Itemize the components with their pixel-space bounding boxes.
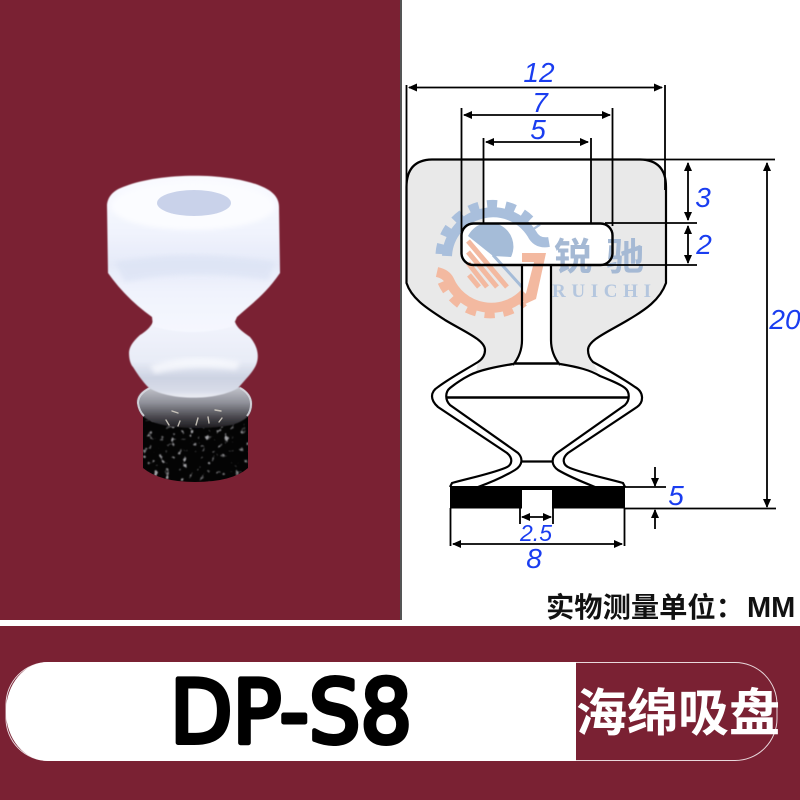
dimension: 20 height (766, 163, 768, 507)
cavity left contour (446, 364, 521, 487)
drawing fills (406, 160, 666, 372)
clear ring (137, 387, 252, 428)
dimension: 3 height (687, 163, 689, 220)
vacuum slot fill (462, 224, 612, 265)
unit note: MM (747, 592, 795, 624)
upper body fill (406, 160, 666, 372)
product type: 海绵吸盘 (576, 672, 780, 746)
model name pill (6, 662, 780, 764)
logo latin wordmark: RUICHI (552, 281, 651, 302)
body shading (115, 255, 275, 282)
cavity right contour (553, 364, 629, 487)
upper body (107, 176, 280, 332)
label 5 thickness: 5 (668, 480, 684, 511)
logo wordmark: 锐驰 (554, 226, 658, 281)
label 5: 5 (530, 114, 546, 145)
label 3: 3 (695, 182, 711, 213)
label 12: 12 (523, 57, 555, 88)
label 8: 8 (526, 543, 542, 574)
dimension: 2.5 bore (520, 490, 553, 524)
dimension: 5 width (484, 138, 591, 223)
extension lines (600, 160, 776, 508)
label 2: 2 (695, 229, 712, 260)
gear lower orange (437, 253, 546, 314)
dimension lines (406, 85, 776, 546)
ring rim highlight (138, 388, 251, 416)
watermark logo (437, 204, 658, 314)
dimension: 8 diameter (450, 508, 624, 546)
model name: DP-S8 (170, 662, 412, 764)
dimension: 2 height (687, 226, 689, 263)
top hole (157, 190, 231, 216)
neck opening fill (484, 160, 591, 224)
dimension: 5 thickness (654, 467, 656, 486)
waist divider (521, 460, 552, 463)
product photo: sponge suction cup (107, 176, 280, 483)
bulge highlight (150, 358, 240, 374)
dimension: 12 width (406, 85, 665, 190)
lower bulge (129, 322, 258, 398)
body outer contour (406, 160, 666, 487)
unit note: 实物测量单位： (546, 591, 744, 623)
drawing outlines (406, 160, 666, 487)
vacuum slot outline (462, 224, 612, 265)
pill outline (6, 662, 777, 760)
stem fill (513, 262, 560, 364)
logo orange stripes (468, 241, 507, 287)
label 2.5: 2.5 (519, 520, 552, 546)
panel divider (400, 0, 402, 620)
label 20: 20 (768, 304, 800, 335)
foam base (143, 416, 248, 483)
top rim brightness (111, 182, 275, 230)
stem outline (513, 265, 560, 365)
balloon divider (447, 396, 628, 399)
logo blue disc (468, 223, 513, 257)
logo diagonal (493, 255, 522, 287)
label 7: 7 (532, 87, 549, 118)
sponge pad section (450, 486, 625, 508)
pill white section (6, 662, 576, 761)
dimension: 7 width (462, 108, 612, 232)
gear upper blue (440, 204, 549, 256)
panel: product photo background (0, 0, 400, 620)
ring highlights (166, 410, 222, 426)
panel: bottom band (0, 626, 800, 800)
neck divider (515, 362, 558, 365)
